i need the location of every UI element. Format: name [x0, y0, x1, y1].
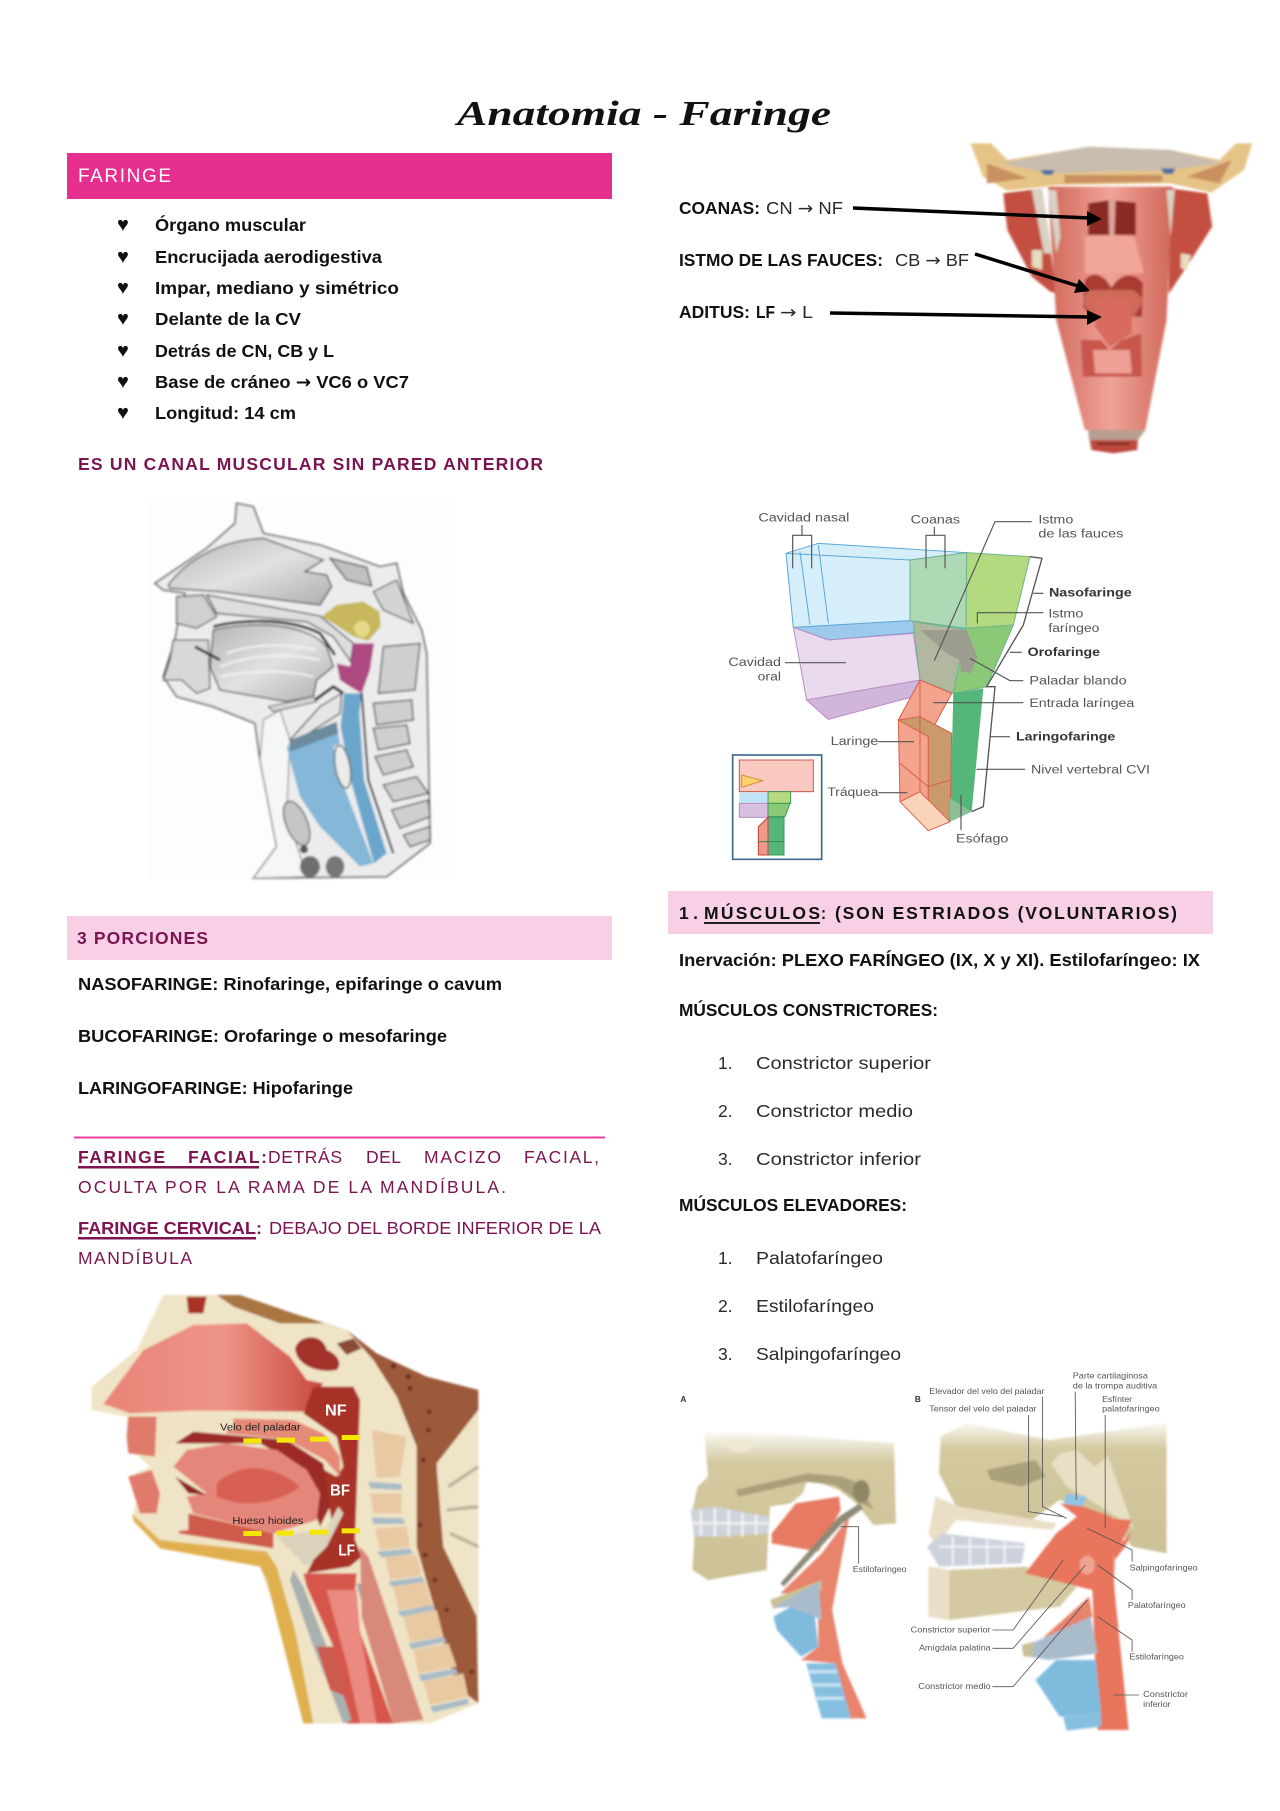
bullet list: Órgano muscular — [155, 214, 306, 235]
shape: cavidad nasal — [786, 543, 967, 640]
label: aditus: LF — [756, 302, 775, 322]
section bar: musculos: : — [821, 903, 826, 923]
figure labels: A — [680, 1395, 686, 1404]
text block: faringe facial: FACIAL: — [188, 1147, 267, 1167]
figure labels: Palatofaríngeo — [1128, 1600, 1186, 1610]
bullet list: ♥ — [117, 246, 129, 268]
figure labels: Constrictor medio — [918, 1681, 991, 1691]
list: elevadores: 1. — [718, 1248, 733, 1268]
figure: coloured sagittal section with NF BF LF — [92, 1295, 478, 1723]
figure labels: palatofaríngeo — [1102, 1404, 1160, 1414]
bullet list: ♥ — [117, 308, 129, 330]
diagram labels: Cavidad — [728, 655, 781, 669]
diagram labels: Esófago — [956, 831, 1009, 845]
list: elevadores: Estilofaríngeo — [756, 1296, 874, 1316]
shape: laringe and traquea — [898, 680, 952, 831]
text block: faringe facial: DEL — [366, 1147, 401, 1167]
figure labels: Estilofaríngeo — [1129, 1652, 1184, 1662]
diagram labels: faríngeo — [1048, 621, 1100, 635]
title: Anatomia - Faringe — [454, 94, 831, 133]
text block: faringe cervical: MANDÍBULA — [78, 1248, 192, 1268]
bullet list: ♥ — [117, 340, 129, 362]
text block: faringe cervical: FARINGE CERVICAL: — [78, 1218, 262, 1238]
inset key diagram — [733, 755, 822, 859]
text block: portions: LARINGOFARINGE: Hipofaringe — [78, 1078, 353, 1098]
list: constrictores: Constrictor superior — [756, 1053, 931, 1073]
text block: faringe facial: FACIAL, — [524, 1147, 599, 1167]
figure: grey sagittal section with coloured pharynx — [147, 500, 457, 880]
section bar: musculos: MÚSCULOS — [704, 902, 820, 923]
text block: faringe facial: FARINGE — [78, 1147, 165, 1167]
figure labels: Esfínter — [1102, 1394, 1132, 1404]
list: elevadores: Palatofaríngeo — [756, 1248, 883, 1268]
label: LF: LF — [338, 1543, 355, 1560]
figure labels: Estilofaríngeo — [853, 1564, 907, 1574]
heading: musculos elevadores: MÚSCULOS ELEVADORES: — [679, 1194, 907, 1215]
section bar: 3 porciones: 3 PORCIONES — [77, 928, 208, 948]
text block: faringe facial: DETRÁS — [268, 1147, 342, 1167]
text block: faringe facial: MACIZO — [424, 1147, 501, 1167]
label: aditus — [679, 302, 813, 323]
diagram labels: Laringe — [831, 734, 879, 748]
text block: faringe cervical: DEBAJO DEL BORDE INFERIOR DE LA — [269, 1218, 601, 1238]
label: istmo de las fauces: ISTMO DE LAS FAUCES: — [679, 250, 883, 270]
label: BF: BF — [330, 1483, 350, 1500]
bullet list: Longitud: 14 cm — [155, 403, 296, 423]
list: elevadores — [718, 1248, 901, 1364]
bullet list — [117, 214, 409, 424]
diagram labels: Nivel vertebral CVI — [1031, 763, 1150, 777]
shape: cavidad oral — [793, 627, 920, 719]
figure labels: B — [915, 1395, 921, 1404]
diagram labels: Istmo — [1038, 512, 1074, 526]
diagram labels: de las fauces — [1038, 527, 1123, 541]
label: coanas — [679, 198, 843, 219]
bracket outline — [972, 557, 1042, 812]
leader lines — [785, 522, 1043, 830]
diagram labels: Tráquea — [827, 785, 879, 799]
text block: faringe facial — [78, 1147, 599, 1197]
figure labels: Constrictor superior — [911, 1624, 991, 1634]
text block: faringe facial: OCULTA POR LA RAMA DE LA MANDÍBULA. — [78, 1177, 506, 1197]
diagram labels — [728, 511, 1150, 845]
bullet list: ♥ — [117, 214, 129, 236]
bullet list: ♥ — [117, 402, 129, 424]
text: inervacion: Inervación: PLEXO FARÍNGEO (IX, X y XI). Estilofaríngeo: IX — [679, 949, 1200, 970]
figure labels: Amígdala palatina — [919, 1643, 991, 1653]
label: istmo de las fauces: CB → BF — [895, 250, 969, 271]
bullet list: ♥ — [117, 277, 129, 299]
label: hueso hioides: Hueso hioides — [232, 1516, 303, 1527]
subheading: canal muscular: ES UN CANAL MUSCULAR SIN PARED ANTERIOR — [78, 454, 543, 474]
section bar: musculos: 1. — [679, 903, 698, 923]
heading bar: faringe: FARINGE — [78, 166, 171, 187]
dashed line: velo del paladar — [243, 1435, 360, 1443]
bullet list: ♥ — [117, 371, 129, 393]
diagram labels: oral — [758, 669, 781, 683]
section bar: musculos: (SON ESTRIADOS (VOLUNTARIOS) — [835, 903, 1177, 923]
bullet list: Delante de la CV — [155, 309, 301, 329]
figure: posterior view of the open pharynx — [971, 143, 1252, 453]
panel A: skull and stylopharyngeus — [691, 1433, 896, 1718]
bullet list: Encrucijada aerodigestiva — [155, 247, 382, 267]
label: aditus: ADITUS: — [679, 302, 750, 322]
figure labels — [680, 1371, 1198, 1709]
label: aditus: → L — [780, 302, 813, 323]
heading bar: faringe — [67, 153, 612, 199]
diagram labels: Laringofaringe — [1016, 729, 1116, 743]
shape: paladar blando — [920, 630, 977, 673]
figure: schematic pharynx regions diagram — [728, 511, 1150, 859]
figure labels: de la trompa auditiva — [1073, 1381, 1157, 1391]
label: istmo de las fauces — [679, 250, 969, 271]
figure labels: Salpingofaríngeo — [1130, 1562, 1198, 1572]
arrow: istmo de las fauces — [975, 254, 1090, 293]
list: elevadores: 2. — [718, 1296, 733, 1316]
panel B: dissection with muscles — [927, 1423, 1167, 1731]
list: constrictores: 3. — [718, 1149, 733, 1169]
diagram labels: Entrada laríngea — [1029, 696, 1135, 710]
section bar: musculos — [668, 891, 1213, 934]
diagram labels: Cavidad nasal — [758, 511, 849, 525]
section bar: 3 porciones — [67, 916, 612, 960]
diagram labels: Nasofaringe — [1049, 586, 1132, 600]
bullet list: Base de cráneo → VC6 o VC7 — [155, 372, 409, 393]
list: elevadores: 3. — [718, 1344, 733, 1364]
label: velo del paladar: Velo del paladar — [220, 1423, 301, 1434]
list: constrictores: 2. — [718, 1101, 733, 1121]
list: constrictores: Constrictor medio — [756, 1101, 913, 1121]
bullet list: Impar, mediano y simétrico — [155, 278, 399, 298]
text block: portions: BUCOFARINGE: Orofaringe o mesofaringe — [78, 1026, 447, 1046]
figure: pharyngeal muscles, panels A and B — [680, 1371, 1198, 1731]
arrow: coanas — [853, 208, 1102, 226]
figure labels: Parte cartilaginosa — [1073, 1371, 1148, 1381]
skull base bone — [971, 143, 1252, 193]
list: elevadores: Salpingofaríngeo — [756, 1344, 901, 1364]
label: coanas: CN → NF — [766, 198, 843, 219]
list: constrictores: 1. — [718, 1053, 733, 1073]
leader lines — [841, 1392, 1139, 1695]
diagram labels: Istmo — [1048, 607, 1084, 621]
figure labels: Constrictor — [1143, 1689, 1188, 1699]
shape: laringofaringe — [950, 688, 983, 822]
figure labels: inferior — [1143, 1699, 1171, 1709]
list: constrictores: Constrictor inferior — [756, 1149, 921, 1169]
bullet list: Detrás de CN, CB y L — [155, 341, 334, 361]
diagram labels: Orofaringe — [1028, 645, 1100, 659]
shape: nasofaringe and orofaringe — [910, 553, 1030, 693]
diagram labels: Coanas — [911, 512, 960, 526]
dashed line: hueso hioides — [243, 1528, 360, 1536]
label: coanas: COANAS: — [679, 198, 760, 218]
figure labels: Elevador del velo del paladar — [929, 1386, 1045, 1396]
diagram labels: Paladar blando — [1029, 673, 1127, 687]
arrow: aditus — [830, 310, 1102, 325]
text block: portions — [78, 974, 502, 1098]
figure labels: Tensor del velo del paladar — [929, 1404, 1037, 1414]
heading: musculos constrictores: MÚSCULOS CONSTRICTORES: — [679, 999, 938, 1020]
label: NF: NF — [325, 1403, 347, 1420]
text block: faringe cervical — [78, 1218, 601, 1268]
text block: portions: NASOFARINGE: Rinofaringe, epifaringe o cavum — [78, 974, 502, 994]
list: constrictores — [718, 1053, 931, 1169]
